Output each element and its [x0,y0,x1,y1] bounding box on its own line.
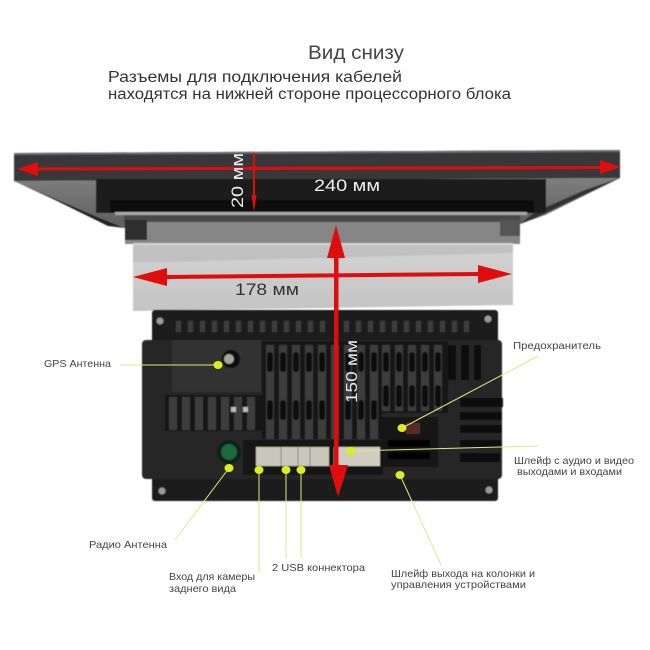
callout: 2 USB connectors [272,466,365,574]
label 150 mm: 150 мм [344,340,361,403]
callout: speaker harness: управления устройствами [391,579,526,591]
callout: rear camera input: Вход для камеры [169,571,255,583]
callout: GPS antenna: GPS Антенна [44,358,111,370]
top vents [176,321,469,332]
right side slots [460,398,503,462]
callout: rear camera input: заднего вида [169,583,236,595]
height arrow 20 mm [252,153,256,212]
lower left vents [165,395,263,431]
screws [156,316,492,494]
callout: audio video harness [346,446,634,478]
description text: Разъемы для подключения кабелей [108,69,402,86]
callout: fuse: Предохранитель [513,340,602,352]
description text: находятся на нижней стороне процессорного блока [108,86,511,103]
photo: head unit screen [14,150,620,228]
photo: metal bracket [125,220,520,311]
label 178 mm: 178 мм [235,281,299,299]
label 20 mm: 20 мм [229,153,247,208]
width arrow 178 mm [133,265,512,286]
width arrow 240 mm [17,160,621,176]
central vents [262,341,382,439]
harness connector block [382,417,438,467]
callout: rear camera input [169,466,264,595]
callout: radio antenna [89,464,234,551]
gps connector [222,350,240,368]
callout: audio video harness: Шлейф с аудио и видео [514,455,634,467]
callout: GPS antenna [44,358,222,370]
title: Вид снизу [308,42,404,64]
height arrow 150 mm [327,225,348,497]
callout: fuse [398,340,602,432]
callout: radio antenna: Радио Антенна [89,539,167,551]
callout: speaker harness [391,471,535,591]
callout: 2 USB connectors: 2 USB коннектора [272,562,365,574]
photo: processor block rear panel [142,310,503,501]
radio antenna connector [217,440,241,464]
white connectors [243,440,383,475]
right upper vents [382,341,481,413]
callout: audio video harness: выходами и входами [517,466,622,478]
callout: speaker harness: Шлейф выхода на колонки и [391,568,535,580]
label 240 mm: 240 мм [314,177,380,195]
description text [108,69,511,103]
